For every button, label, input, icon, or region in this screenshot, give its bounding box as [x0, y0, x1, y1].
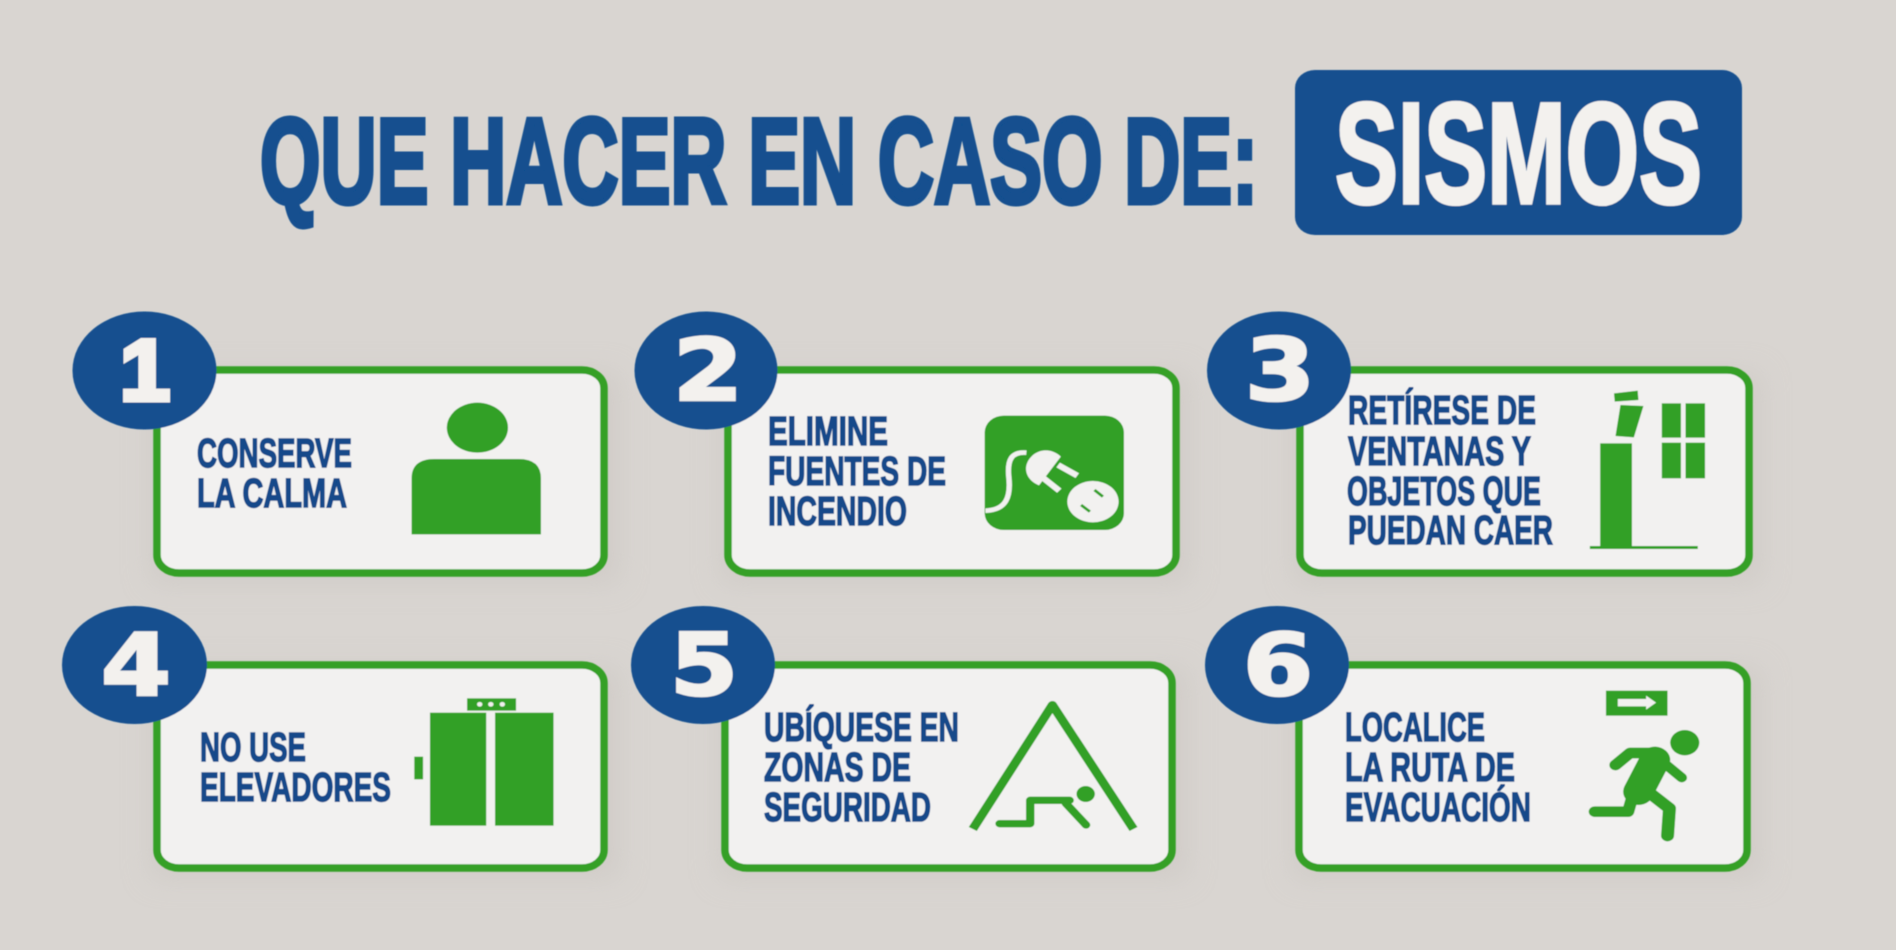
text: conserve la calma: LA CALMA: [197, 470, 347, 516]
text: retirese de ventanas: RETÍRESE DE: [1348, 387, 1536, 433]
title badge: SISMOS: [1295, 70, 1742, 235]
icon: elevator: [414, 698, 554, 826]
text: localice la ruta de evacuacion: EVACUACIÓN: [1345, 784, 1531, 830]
panel: step 4 no use elevadores: [62, 606, 604, 868]
text: retirese de ventanas: OBJETOS QUE: [1347, 468, 1541, 514]
number badge 1: [72, 312, 216, 430]
text: retirese de ventanas: VENTANAS Y: [1348, 428, 1531, 474]
text: ubiquese en zonas de seguridad: SEGURIDAD: [764, 784, 931, 830]
text: no use elevadores: NO USE: [200, 724, 306, 770]
text: no use elevadores: [200, 724, 391, 810]
icon: running person with exit arrow: [1595, 691, 1699, 836]
panel: step 1 conserve la calma: [72, 312, 604, 573]
number badge 3: 3: [1245, 321, 1315, 421]
number badge 6: [1205, 606, 1349, 724]
text: conserve la calma: CONSERVE: [197, 430, 352, 476]
icon: person: [412, 403, 541, 534]
panel: step 2 elimine fuentes de incendio: [634, 312, 1176, 573]
text: retirese de ventanas: PUEDAN CAER: [1348, 507, 1553, 553]
panel: step 6 localice la ruta de evacuacion: [1205, 606, 1747, 868]
text: localice la ruta de evacuacion: [1345, 704, 1531, 830]
number badge 5: 5: [670, 616, 738, 716]
text: localice la ruta de evacuacion: LOCALICE: [1345, 704, 1485, 750]
text: elimine fuentes de incendio: FUENTES DE: [768, 448, 946, 494]
title badge: SISMOS: SISMOS: [1335, 73, 1702, 234]
number badge 6: 6: [1243, 616, 1313, 716]
panel: step 5 ubiquese en zonas de seguridad: [631, 606, 1172, 868]
text: ubiquese en zonas de seguridad: ZONAS DE: [764, 744, 911, 790]
title: QUE HACER EN CASO DE:: [260, 93, 1258, 229]
text: elimine fuentes de incendio: INCENDIO: [768, 488, 907, 534]
icon: person crouching under triangle: [973, 705, 1134, 829]
text: conserve la calma: [197, 430, 352, 516]
text: ubiquese en zonas de seguridad: [764, 704, 959, 830]
icon: window and falling objects: [1590, 391, 1705, 549]
text: retirese de ventanas: [1347, 387, 1553, 553]
text: no use elevadores: ELEVADORES: [200, 764, 391, 810]
number badge 4: [62, 606, 207, 724]
number badge 4: 4: [101, 616, 171, 716]
text: ubiquese en zonas de seguridad: UBÍQUESE EN: [764, 704, 959, 750]
number badge 5: [631, 606, 775, 724]
text: elimine fuentes de incendio: [768, 408, 946, 534]
number badge 2: 2: [673, 321, 743, 421]
panel: step 3 retirese de ventanas: [1207, 312, 1749, 573]
number badge 2: [634, 312, 778, 430]
icon: plug and socket: [985, 416, 1124, 530]
text: localice la ruta de evacuacion: LA RUTA DE: [1345, 744, 1515, 790]
number badge 1: 1: [120, 323, 170, 419]
number badge 3: [1207, 312, 1351, 430]
text: elimine fuentes de incendio: ELIMINE: [768, 408, 888, 454]
